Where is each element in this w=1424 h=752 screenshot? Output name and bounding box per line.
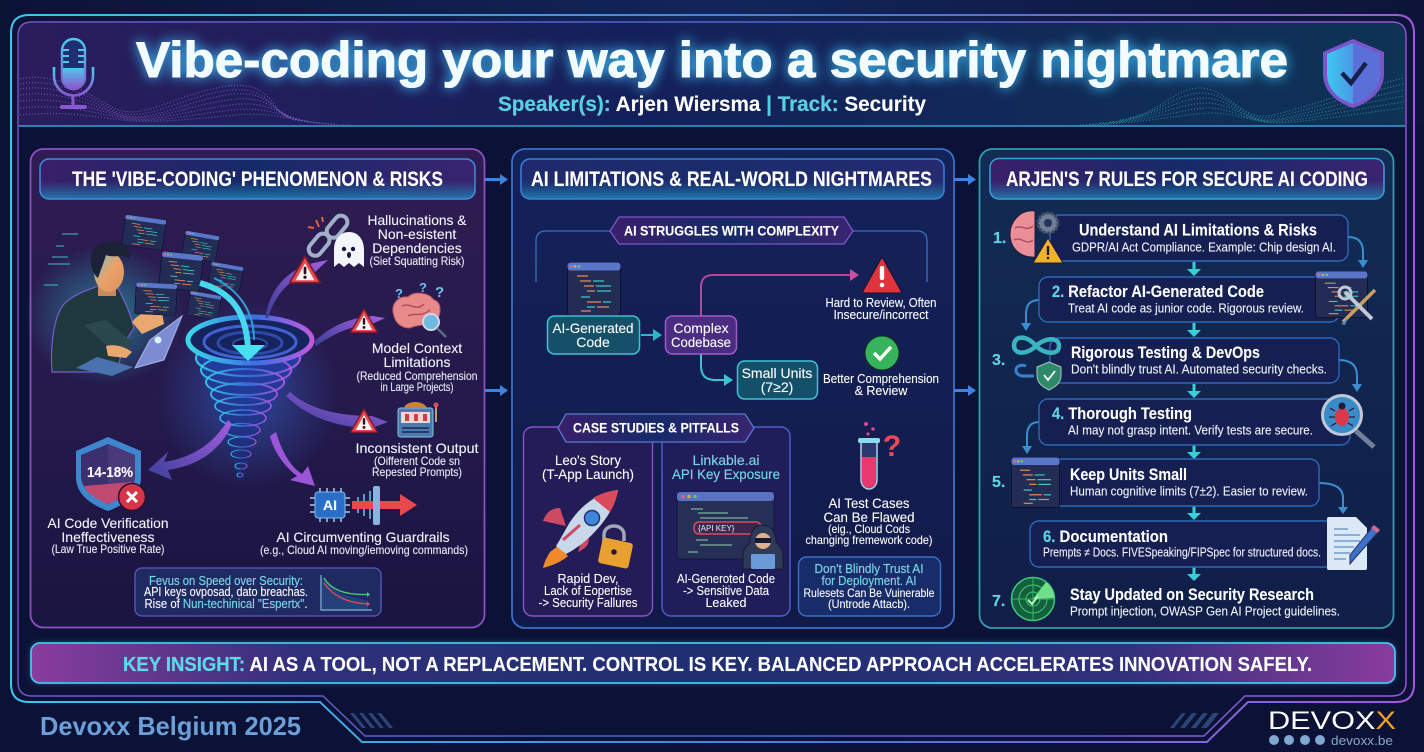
icon: microphone (54, 39, 93, 109)
node: complex codebase: Codebase (671, 334, 731, 350)
arrow: panel one to two, upper (485, 174, 508, 185)
icon: radar (1012, 578, 1054, 620)
text: hard to review: Insecure/incorrect (834, 308, 929, 322)
case card: Leo's story (524, 427, 652, 616)
callout: don't blindly trust AI: Don't Blindly Trust AI (814, 562, 924, 576)
text: circumventing guardrails: (e.g., Cloud AI moving/iemoving commands) (260, 543, 468, 557)
rule 4 (1039, 396, 1374, 447)
arrow: panel one to two, lower (485, 385, 508, 396)
case card: Leo's story: Lack of Eopertise (544, 584, 632, 598)
rule 7 (992, 578, 1340, 620)
node: complex codebase (666, 316, 736, 354)
arrow: to model context (314, 316, 385, 346)
text: inconsistent output: Inconsistent Output (356, 440, 479, 456)
text: better comprehension (823, 372, 939, 398)
panel heading: THE 'VIBE-CODING' PHENOMENON & RISKS (72, 168, 443, 191)
icon: brain with magnifier: ? (435, 284, 444, 301)
case card: Linkable.ai: API Key Exposure (672, 466, 780, 482)
text: model context: Limitations (384, 354, 450, 370)
illustration: floating code windows (121, 215, 244, 320)
text: hallucinations: (Siet Squatting Risk) (370, 254, 464, 268)
case card: Leo's story: Rapid Dev, (558, 572, 618, 586)
text: circumventing guardrails (260, 529, 468, 557)
rule 5: Human cognitive limits (7±2). Easier to review. (1070, 484, 1308, 498)
icon: brain with magnifier: ? (419, 280, 427, 295)
icon: social links (1269, 735, 1325, 745)
rule 3: 3. (992, 352, 1005, 369)
rule 3: Rigorous Testing & DevOps (1071, 344, 1260, 362)
group: case studies (524, 414, 790, 616)
text: AI test cases: AI Test Cases (828, 495, 910, 511)
callout: speed over security (135, 568, 381, 616)
icon: rocket with lock (543, 490, 633, 569)
icon: warning one (290, 256, 320, 283)
callout: don't blindly trust AI: (Untrode Attacb). (828, 597, 910, 611)
panel heading (990, 158, 1384, 199)
panel heading: AI LIMITATIONS & REAL-WORLD NIGHTMARES (531, 168, 932, 191)
panel heading (40, 159, 475, 199)
flow connectors between rules (1021, 237, 1368, 581)
text: verification ineffectiveness: AI Code Verification (48, 515, 168, 531)
text: inconsistent output: (Oifferent Code sn (374, 454, 460, 468)
icon: test tube with question mark: ? (883, 430, 901, 463)
text: model context: (Reduced Comprehension (356, 369, 478, 383)
node: small units (738, 361, 818, 399)
case card: Leo's story: (T-App Launch) (542, 466, 634, 482)
rule 2: Treat AI code as junior code. Rigorous review. (1068, 302, 1304, 316)
rule 1: GDPR/AI Act Compliance. Example: Chip design AI. (1072, 240, 1336, 254)
footer: event name: Devoxx Belgium 2025 (40, 711, 301, 741)
icon: magnifier with bug (1322, 396, 1374, 447)
rule 6: Prempts ≠ Docs. FIVESpeaking/FIPSpec for structured docs. (1043, 546, 1321, 560)
icon: code window with tools (1315, 271, 1375, 325)
rule 2 (1039, 271, 1375, 325)
text: AI test cases (806, 495, 933, 547)
icon: warning three (350, 409, 378, 432)
case card: Leo's story: Leo's Story (555, 452, 621, 468)
panel: seven rules for secure AI coding (980, 149, 1394, 628)
text: hard to review (826, 296, 937, 322)
chart: declining security trend (321, 575, 372, 610)
arrow: panel two to three, lower (954, 385, 976, 396)
key insight banner (31, 643, 1395, 683)
rule 1: Understand AI Limitations & Risks (1079, 222, 1317, 240)
text: hallucinations: Dependencies (372, 240, 462, 256)
text: hallucinations: Hallucinations & (368, 212, 467, 228)
text: inconsistent output: Repested Prompts) (372, 465, 462, 479)
case card: Linkable.ai: AI-Generoted Code (677, 572, 775, 586)
title: Vibe-coding your way into a security nightmare (136, 32, 1288, 88)
subheading: AI struggles with complexity: AI STRUGGLES WITH COMPLEXITY (624, 224, 839, 238)
callout: don't blindly trust AI: for Deployment. AI (822, 574, 916, 588)
case card: Linkable.ai: Linkable.ai (693, 452, 759, 468)
icon: verification shield with failure badge: 14-18% (87, 464, 133, 481)
key insight banner: KEY INSIGHT: AI AS A TOOL, NOT A REPLACEMENT. CONTROL IS KEY. BALANCED APPROACH ACCELERATES INNOVATION SAFELY. (123, 654, 1312, 676)
text: verification ineffectiveness: (Law True Positive Rate) (52, 542, 164, 556)
node: AI-generated code (548, 316, 640, 354)
text: model context (356, 340, 478, 394)
rule 5: Keep Units Small (1070, 466, 1187, 484)
rule 5 (992, 457, 1319, 508)
text: circumventing guardrails: AI Circumventing Guardrails (276, 529, 450, 545)
icon: test tube with question mark (858, 422, 901, 489)
arrow: to hallucinations (265, 260, 328, 318)
icon: small code window (1011, 457, 1060, 508)
icon: warning two (350, 309, 378, 332)
arrow: code to codebase (641, 329, 662, 341)
icon: ghost (334, 232, 364, 267)
rule 6 (1030, 517, 1380, 570)
footer: Devoxx logo: DEVO XX (1268, 707, 1396, 735)
icon: broken chain (306, 213, 350, 258)
text: inconsistent output (356, 440, 479, 479)
illustration: code tornado (158, 278, 338, 490)
icon: brain with magnifier (393, 280, 446, 337)
text: AI test cases: Can Be Flawed (824, 509, 914, 525)
icon: leaked code with hacker (677, 492, 783, 569)
text: verification ineffectiveness: Ineffectiveness (61, 529, 155, 545)
icon: green check (865, 336, 899, 370)
arrow: to verification (148, 420, 232, 480)
footer: Devoxx logo: devoxx.be (1331, 733, 1393, 748)
callout: speed over security: Fevus on Speed over Security: (149, 574, 303, 588)
rule 1: 1. (993, 230, 1006, 247)
illustration: developer at laptop (25, 234, 185, 385)
rule 5: 5. (992, 474, 1005, 491)
text: model context: Model Context (372, 340, 462, 356)
panel heading (521, 159, 944, 199)
case card: Linkable.ai: -> Sensitive Data (683, 584, 769, 598)
text: model context: in Large Projects) (380, 380, 454, 394)
panel: vibe-coding phenomenon and risks (25, 149, 484, 628)
text: better comprehension: & Review (855, 384, 908, 398)
rule 2: 2. Refactor AI-Generated Code (1052, 283, 1264, 301)
text: AI test cases: changing fremework code) (806, 533, 933, 547)
rule 3 (992, 338, 1339, 390)
node: AI-generated code: Code (576, 334, 610, 350)
arrow: codebase to small units (701, 354, 733, 386)
callout: speed over security: API keys ovposad, dato breachas. (144, 585, 308, 599)
case card: Leo's story: -> Security Fallures (538, 596, 638, 610)
subtitle: speaker and track: Speaker(s): Arjen Wiersma | Track: Security (498, 93, 926, 116)
icon: brain, gear and warning (1010, 211, 1063, 263)
subheading: case studies and pitfalls (558, 414, 754, 442)
callout: don't blindly trust AI: Rulesets Can Be Vuinerable (804, 586, 935, 600)
callout: speed over security: Rise of Nun-techinical "Espertx". (144, 597, 308, 611)
subheading: case studies and pitfalls: CASE STUDIES & PITFALLS (573, 420, 739, 436)
text: better comprehension: Better Comprehension (823, 372, 939, 386)
icon: security shield (1323, 39, 1384, 108)
case card: Linkable.ai: Leaked (705, 596, 747, 610)
rule 7: Prompt injection, OWASP Gen AI Project guidelines. (1070, 604, 1340, 618)
icon: AI chip breaking guardrail (310, 486, 417, 525)
arrow: to guardrails (270, 432, 315, 486)
node: complex codebase: Complex (673, 320, 729, 336)
icon: leaked code with hacker: {API KEY} (698, 524, 735, 533)
icon: document with pencil (1327, 517, 1380, 570)
arrow: panel two to three, upper (954, 174, 976, 185)
node: small units: (7≥2) (761, 379, 793, 395)
case card: Linkable.ai (662, 427, 790, 616)
icon: AI chip breaking guardrail: AI (323, 497, 337, 513)
rule 1 (993, 211, 1348, 263)
arrow: to inconsistent output (286, 392, 388, 428)
icon: verification shield with failure badge (76, 437, 146, 511)
footer: Devoxx logo (1268, 707, 1396, 748)
rule 7: 7. (992, 593, 1005, 610)
icon: infinity loop with shield (1014, 338, 1061, 390)
text: hallucinations (368, 212, 467, 268)
rule 4: 4. Thorough Testing (1052, 405, 1192, 423)
callout: don't blindly trust AI (798, 557, 940, 616)
header band (19, 23, 1405, 126)
panel: AI limitations and real-world nightmares (512, 149, 954, 628)
icon: red warning (863, 257, 901, 293)
node: AI-generated code: AI-Generated (552, 320, 634, 336)
rule 3: Don't blindly trust AI. Automated security checks. (1071, 362, 1327, 376)
text: hallucinations: Non-esistent (378, 226, 456, 242)
text: hard to review: Hard to Review, Often (826, 296, 937, 310)
rule 7: Stay Updated on Security Research (1070, 586, 1314, 604)
icon: brain with magnifier: ? (395, 286, 403, 301)
text: verification ineffectiveness (48, 515, 168, 556)
arrow: codebase to hard review (701, 269, 859, 316)
text: AI test cases: (eig., Cloud Cods (828, 522, 910, 536)
rule 4: AI may not grasp intent. Verify tests are secure. (1068, 424, 1313, 438)
rule 6: 6. Documentation (1043, 528, 1168, 546)
icon: code window (568, 262, 620, 316)
icon: slot machine (398, 402, 438, 437)
title: Vibe-coding your way into a security nightmare (136, 32, 1288, 88)
node: small units: Small Units (742, 365, 812, 381)
subheading: AI struggles with complexity (610, 217, 853, 244)
